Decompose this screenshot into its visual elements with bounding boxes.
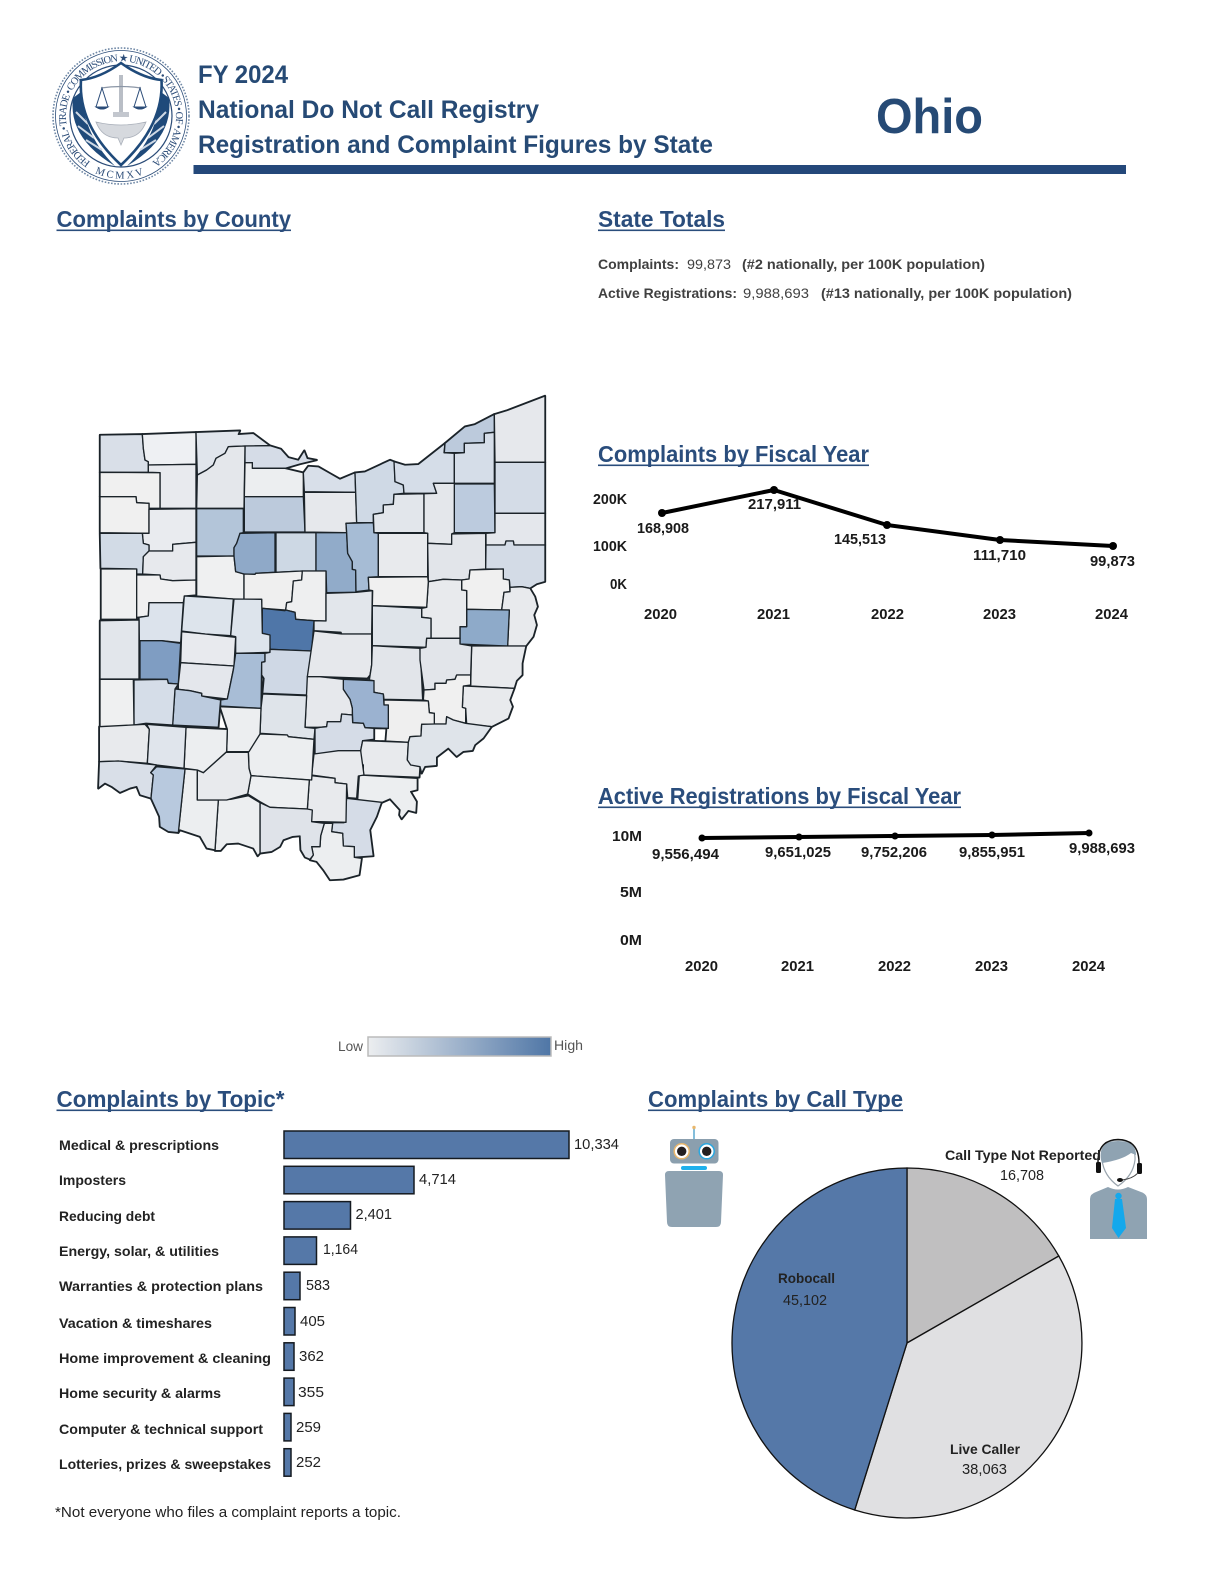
line chart: active registrations by fiscal year: 9,855,951 [959,845,1025,861]
line chart: complaints by fiscal year: 217,911 [748,497,801,513]
line chart: active registrations by fiscal year: 10M [612,829,642,845]
bar chart: complaints by topic: Imposters [59,1172,126,1188]
line chart: complaints by fiscal year: 2023 [983,607,1016,623]
slice: live caller [855,1256,1082,1518]
bar chart: complaints by topic: 362 [299,1349,324,1365]
heading: complaints by county: Complaints by County [56,206,291,232]
state totals text: 9,988,693 [743,285,809,301]
state totals text: Complaints: [598,256,679,272]
line chart: complaints by fiscal year: 100K [593,539,628,555]
bar chart: complaints by topic: 405 [300,1314,325,1330]
title: Registration and Complaint Figures by State [198,131,713,159]
line chart: active registrations by fiscal year: 2022 [878,959,911,975]
line chart: active registrations by fiscal year: 0M [620,933,642,949]
title: FY 2024 [198,61,288,89]
heading: state totals: State Totals [598,206,725,232]
line chart: complaints by fiscal year: 0K [610,577,627,593]
bar chart: complaints by topic: Energy, solar, & utilities [59,1243,219,1259]
pie chart: complaints by call type: Robocall [778,1270,835,1286]
icon: call center agent [1090,1140,1147,1239]
line chart: active registrations by fiscal year: 5M [620,885,642,901]
bar chart: complaints by topic: 355 [298,1385,324,1401]
line chart: complaints by fiscal year: 2022 [871,607,904,623]
line chart: complaints by fiscal year: 2021 [757,607,790,623]
line chart: active registrations by fiscal year: 9,752,206 [861,845,927,861]
bar chart: complaints by topic: Medical & prescriptions [59,1137,219,1153]
line chart: active registrations by fiscal year: 2023 [975,959,1008,975]
pie chart: complaints by call type: Live Caller [950,1441,1021,1457]
pie chart: complaints by call type: 45,102 [783,1293,827,1309]
line chart: complaints by fiscal year: 200K [593,492,628,508]
line chart: complaints by fiscal year: 2020 [644,607,677,623]
state name: Ohio [876,90,983,144]
bar chart: complaints by topic: 4,714 [419,1172,456,1188]
bar chart: complaints by topic: Vacation & timeshares [59,1315,212,1331]
FTC seal logo: FEDERAL • TRADE • COMMISSION ★ UNITED • STATES • OF • AMERICA [59,54,183,168]
state totals text: (#2 nationally, per 100K population) [742,256,985,272]
bar chart: complaints by topic: 10,334 [574,1137,619,1153]
header rule [194,165,1126,174]
state totals text: Active Registrations: [598,285,737,301]
slice: call type not reported [907,1168,1059,1343]
line chart: complaints by fiscal year: 99,873 [1090,554,1135,570]
footnote: *Not everyone who files a complaint reports a topic. [55,1505,401,1521]
bar chart: complaints by topic: Home security & alarms [59,1385,221,1401]
heading: complaints by topic: Complaints by Topic* [56,1086,285,1112]
line chart: active registrations by fiscal year [612,829,1135,975]
line chart: complaints by fiscal year [593,486,1135,623]
pie chart: complaints by call type: Call Type Not Reported [945,1147,1101,1163]
bar chart: complaints by topic: 259 [296,1420,321,1436]
map legend: High [554,1037,583,1053]
line chart: active registrations by fiscal year: 2020 [685,959,718,975]
map legend [338,1037,583,1056]
title: National Do Not Call Registry [198,96,539,124]
heading: active registrations by fiscal year: Active Registrations by Fiscal Year [598,783,961,809]
slice: robocall [732,1168,907,1510]
line chart: active registrations by fiscal year: 9,556,494 [652,847,719,863]
state totals text: (#13 nationally, per 100K population) [821,285,1072,301]
FTC seal logo: MCMXV [95,166,142,179]
icon: robot [665,1126,723,1227]
heading: complaints by fiscal year: Complaints by Fiscal Year [598,441,869,467]
bar chart: complaints by topic: 583 [306,1278,330,1294]
line chart: active registrations by fiscal year: 2024 [1072,959,1105,975]
line chart: active registrations by fiscal year: 9,651,025 [765,845,831,861]
line chart: complaints by fiscal year: 145,513 [834,532,886,548]
title [198,61,713,159]
line chart: complaints by fiscal year: 2024 [1095,607,1128,623]
pie chart: complaints by call type [732,1147,1101,1518]
bar chart: complaints by topic: Warranties & protection plans [59,1278,263,1294]
bar chart: complaints by topic: Home improvement & cleaning [59,1350,271,1366]
line chart: active registrations by fiscal year: 2021 [781,959,814,975]
bar chart: complaints by topic: 2,401 [356,1207,392,1223]
county choropleth map [98,396,545,880]
state totals text: 99,873 [687,256,731,272]
state totals text [598,256,1072,301]
bar chart: complaints by topic: Lotteries, prizes & sweepstakes [59,1456,271,1472]
line chart: complaints by fiscal year: 168,908 [637,521,689,537]
bar chart: complaints by topic [59,1131,619,1476]
line chart: active registrations by fiscal year: 9,988,693 [1069,841,1135,857]
pie chart: complaints by call type: 38,063 [962,1462,1007,1478]
bar chart: complaints by topic: Computer & technical support [59,1421,263,1437]
heading: complaints by call type: Complaints by Call Type [648,1086,903,1112]
bar chart: complaints by topic: Reducing debt [59,1208,155,1224]
bar chart: complaints by topic: 1,164 [323,1242,358,1258]
pie chart: complaints by call type: 16,708 [1000,1168,1044,1184]
map legend: Low [338,1038,364,1054]
line chart: complaints by fiscal year: 111,710 [973,548,1026,564]
bar chart: complaints by topic: 252 [296,1455,321,1471]
